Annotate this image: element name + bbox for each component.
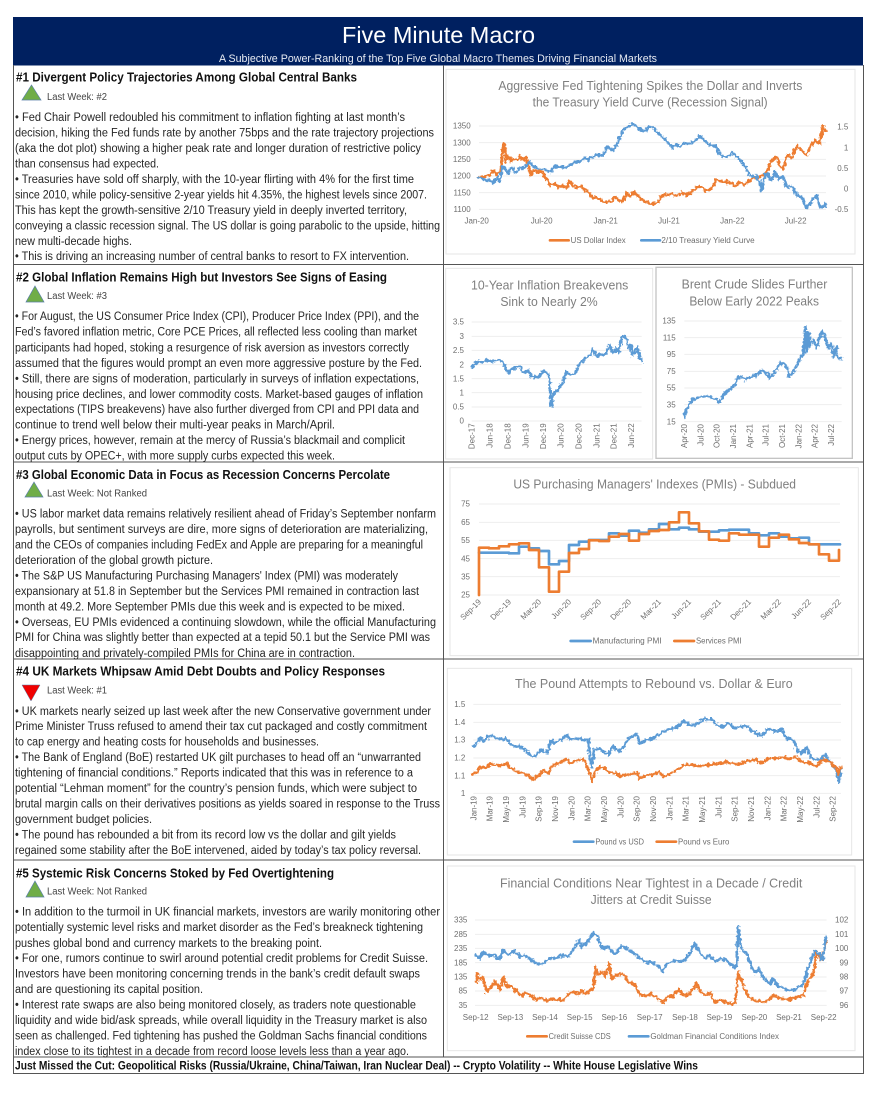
heading 2: #2 Global Inflation Remains High but Investors See Signs of Easing (16, 270, 387, 284)
icon: green up triangle (26, 881, 44, 897)
y axis labels: 0.5 (453, 403, 465, 412)
y axis labels: 2.5 (453, 346, 465, 355)
x axis labels: Sep-20 (579, 597, 603, 622)
legend: Credit Suisse CDS (549, 1032, 611, 1041)
right axis labels: 98 (839, 973, 849, 982)
body text: Investors have been monitoring concerning trends in the bank’s credit default swaps (15, 968, 420, 980)
x axis labels: Jun-20 (549, 597, 573, 621)
chart title: Sink to Nearly 2% (500, 294, 598, 309)
x axis labels: Jul-22 (785, 216, 807, 225)
y axis labels: 1.5 (453, 374, 465, 383)
x axis labels: Sep-20 (633, 795, 642, 822)
x axis labels: Dec-19 (489, 597, 513, 622)
x axis labels: Sep-12 (463, 1013, 489, 1022)
icon: green up triangle (22, 85, 41, 100)
left axis labels: 85 (458, 987, 468, 996)
body text: • Still, there are signs of moderation, particularly in surveys of inflation expectations, (15, 374, 419, 386)
body text: assumed that the figures would prompt an even more aggressive posture by the Fed. (15, 358, 422, 370)
x axis labels: Sep-16 (601, 1013, 628, 1022)
x axis labels: Jul-20 (696, 423, 705, 446)
legend: Goldman Financial Conditions Index (650, 1032, 779, 1041)
x axis labels (464, 216, 807, 225)
x axis labels: Jul-22 (812, 795, 821, 818)
x axis labels: Sep-22 (811, 1013, 837, 1022)
right axis labels: -0.5 (835, 205, 849, 214)
x axis labels (467, 423, 636, 449)
left axis labels: 1200 (453, 172, 471, 181)
body text: conveying a classic recession signal. The US dollar is going parabolic to the upside, hitting (15, 220, 440, 232)
chart: pound vs dollar and euro (447, 668, 852, 855)
body text: brutal margin calls on their derivatives positions as yields soared in response to the Truss (15, 798, 440, 810)
x axis labels: Jul-21 (762, 423, 771, 446)
line: 2/10 treasury yield curve (479, 124, 826, 208)
body text: • The pound has rebounded a bit from its record low vs the dollar and gilt yields (15, 830, 396, 842)
x axis labels: May-20 (600, 795, 609, 823)
left axis labels: 335 (454, 916, 468, 925)
left axis labels: 35 (458, 1001, 468, 1010)
body text (15, 706, 440, 857)
x axis labels: Jun-21 (592, 423, 601, 448)
x axis labels: Sep-18 (672, 1013, 698, 1022)
line: manufacturing PMI (479, 524, 840, 564)
last week rank: Last Week: Not Ranked (47, 488, 147, 500)
x axis labels: Jun-22 (627, 423, 636, 448)
chart title: Aggressive Fed Tightening Spikes the Dollar and Inverts (498, 78, 803, 93)
y axis labels: 45 (461, 554, 471, 563)
chart title: Brent Crude Slides Further (682, 277, 828, 292)
body text (15, 112, 440, 263)
body text: and are questioning its capital position. (15, 984, 203, 996)
y axis labels (461, 500, 471, 600)
x axis labels: Sep-14 (532, 1013, 558, 1022)
body text: regained some stability after the BoE intervened, aided by today’s tax policy reversal. (15, 845, 421, 857)
y axis labels: 15 (667, 417, 676, 426)
x axis labels: Sep-19 (535, 795, 544, 822)
x axis labels: Mar-21 (682, 795, 691, 821)
left axis labels: 1300 (453, 138, 471, 147)
body text: since 2010, while policy-sensitive 2-year yields hit 4.35%, the highest levels since 2007. (15, 190, 427, 202)
legend: Pound vs Euro (678, 837, 730, 846)
body text: • Fed Chair Powell redoubled his commitment to inflation fighting at last month’s (15, 112, 405, 124)
body text: continue to trend well below their multi-year peaks in March/April. (15, 420, 335, 432)
body text: new multi-decade highs. (15, 236, 132, 248)
panel: theme 2 text (15, 270, 423, 462)
chart title: Jitters at Credit Suisse (591, 892, 712, 907)
x axis labels: Mar-21 (639, 597, 663, 622)
left axis labels (454, 916, 468, 1010)
right axis labels: 97 (839, 987, 849, 996)
x axis labels: Jul-22 (827, 423, 836, 446)
line: pound vs euro (474, 757, 841, 782)
x axis labels (459, 597, 843, 622)
body text: This has kept the growth-sensitive 2/10 Treasury yield in deeply inverted territory, (15, 205, 407, 217)
y axis labels: 1.4 (454, 718, 466, 727)
chart title: US Purchasing Managers' Indexes (PMIs) - Subdued (513, 476, 796, 491)
x axis labels: Sep-21 (776, 1013, 802, 1022)
y axis labels: 1.1 (454, 771, 466, 780)
left axis labels: 1150 (453, 188, 471, 197)
y axis labels: 75 (461, 500, 471, 509)
x axis labels: Sep-21 (731, 795, 740, 822)
chart title: Below Early 2022 Peaks (689, 293, 819, 308)
x axis labels: Dec-20 (609, 597, 633, 622)
body text: • Energy prices, however, remain at the mercy of Russia’s blackmail and complicit (15, 435, 406, 447)
body text: (aka the dot plot) showing a higher peak rate and longer duration of restrictive policy (15, 143, 421, 155)
x axis labels: Sep-22 (819, 597, 843, 622)
x axis labels: Jan-22 (763, 795, 772, 820)
legend: US Dollar Index (571, 236, 626, 245)
chart: 10-year inflation breakevens (446, 268, 653, 459)
y axis labels: 3 (460, 332, 465, 341)
legend: Services PMI (696, 637, 742, 646)
body text: to cap energy and heating costs for households and businesses. (15, 736, 319, 748)
x axis labels (680, 423, 836, 448)
right axis labels: 99 (839, 958, 849, 967)
right axis labels: 1.5 (837, 123, 849, 132)
body text: Fed’s favored inflation metric, Core PCE Prices, all reflected less cooling than market (15, 326, 418, 338)
heading 1: #1 Divergent Policy Trajectories Among Global Central Banks (16, 70, 357, 84)
chart: financial conditions and Credit Suisse CDS (447, 866, 855, 1051)
x axis labels: Apr-21 (745, 423, 754, 448)
x axis labels: Mar-20 (519, 597, 543, 622)
y axis labels: 55 (461, 536, 471, 545)
body text: potentially systemic level risks and market disorder as the Fed’s breakneck tightening (15, 922, 423, 934)
subtitle: A Subjective Power-Ranking of the Top Five Global Macro Themes Driving Financial Markets (219, 53, 657, 65)
x axis labels: Dec-19 (539, 423, 548, 449)
panel: theme 4 text (15, 664, 440, 857)
body text (15, 508, 436, 660)
x axis labels: Jun-20 (557, 423, 566, 448)
body text: expectations (TIPS breakevens) have also further diverged from CPI and PPI data and (15, 404, 419, 416)
title: Five Minute Macro (342, 22, 535, 48)
right axis labels: 102 (835, 916, 849, 925)
x axis labels: Oct-21 (778, 423, 787, 448)
last week rank: Last Week: #1 (47, 686, 107, 696)
last week rank: Last Week: Not Ranked (47, 886, 147, 898)
right axis labels: 96 (839, 1001, 849, 1010)
panel: theme 1 text (15, 70, 440, 263)
body text: than consensus had expected. (15, 158, 159, 170)
right axis labels (835, 123, 849, 214)
left axis labels: 1350 (453, 122, 471, 131)
legend (574, 837, 730, 846)
icon: green up triangle (25, 482, 43, 497)
y axis labels: 1.5 (454, 700, 466, 709)
body text: participants had hoped, stoking a resurgence of risk aversion as investors correctly (15, 342, 409, 354)
x axis labels: Mar-22 (780, 795, 789, 821)
x axis labels: Jan-20 (464, 216, 489, 225)
x axis labels: May-22 (796, 795, 805, 823)
x axis labels: Oct-20 (713, 423, 722, 448)
x axis labels: Jan-21 (665, 795, 674, 820)
legend (571, 637, 742, 646)
legend (527, 1032, 779, 1041)
y axis labels: 35 (461, 572, 471, 581)
right axis labels: 0.5 (837, 164, 849, 173)
last week rank: Last Week: #2 (47, 92, 107, 103)
x axis labels: Dec-21 (729, 597, 753, 622)
body text: and the CEOs of companies including FedEx and Apple are preparing for a meaningful (15, 540, 423, 552)
body text: government budget policies. (15, 814, 152, 826)
x axis labels: Mar-20 (584, 795, 593, 821)
left axis labels: 1250 (453, 155, 471, 164)
heading 5: #5 Systemic Risk Concerns Stoked by Fed Overtightening (16, 866, 334, 880)
body text: • This is driving an increasing number of central banks to resort to FX intervention. (15, 251, 409, 263)
x axis labels: May-21 (698, 795, 707, 823)
x axis labels: Jan-22 (720, 216, 745, 225)
x axis labels: Jan-21 (729, 423, 738, 448)
legend: 2/10 Treasury Yield Curve (661, 236, 755, 245)
x axis labels: Jun-21 (669, 597, 693, 621)
left axis labels: 185 (454, 958, 468, 967)
y axis labels: 0 (460, 417, 465, 426)
line: brent crude price (684, 327, 842, 417)
line: US dollar index (479, 125, 826, 204)
body text: payrolls, but sentiment surveys are dire, more signs of deterioration are materializing, (15, 524, 428, 536)
x axis labels: Dec-21 (610, 423, 619, 449)
x axis labels: Jun-22 (789, 597, 813, 621)
body text: output cuts by OPEC+, with more supply curbs expected this week. (15, 450, 335, 462)
body text: • US labor market data remains relatively resilient ahead of Friday’s September nonfarm (15, 508, 436, 520)
chart title: the Treasury Yield Curve (Recession Signal) (533, 95, 768, 110)
left axis labels (453, 122, 471, 214)
y axis labels (453, 318, 465, 426)
x axis labels: Sep-13 (497, 1013, 524, 1022)
panel: theme 3 text (15, 467, 436, 660)
left axis labels: 1100 (453, 205, 471, 214)
body text (15, 906, 440, 1058)
x axis labels: Jan-21 (593, 216, 618, 225)
right axis labels: 100 (835, 944, 849, 953)
body text: • Interest rate swaps are also being monitored closely, as traders note questionable (15, 1000, 416, 1012)
body text: pushes global bond and currency markets to the breaking point. (15, 938, 322, 950)
left axis labels: 135 (454, 973, 468, 982)
x axis labels: Sep-22 (829, 795, 838, 822)
y axis labels (454, 700, 466, 798)
x axis labels: Jan-22 (794, 423, 803, 448)
right axis labels (835, 916, 849, 1010)
x axis labels (463, 1013, 837, 1022)
last week rank: Last Week: #3 (47, 291, 107, 302)
x axis labels: Apr-22 (811, 423, 820, 448)
left axis labels: 235 (454, 944, 468, 953)
body text (15, 311, 423, 462)
icon: green up triangle (26, 286, 44, 302)
body text: potential “Lehman moment” for the country’s pension funds, which were subject to (15, 783, 417, 795)
x axis labels: Sep-20 (741, 1013, 768, 1022)
line: services PMI (479, 512, 839, 595)
body text: seen as challenged. Fed tightening has pushed the Goldman Sachs financial conditions (15, 1030, 427, 1042)
y axis labels: 2 (460, 360, 465, 369)
y axis labels: 1 (461, 789, 466, 798)
x axis labels: Jun-19 (521, 423, 530, 448)
panel: theme 5 text (15, 866, 440, 1058)
chart title: The Pound Attempts to Rebound vs. Dollar & Euro (515, 676, 793, 691)
body text: index close to its tightest in a decade from record loose levels less than a year ago. (15, 1046, 409, 1058)
y axis labels: 95 (667, 350, 676, 359)
y axis labels (662, 317, 676, 426)
body text: • UK markets nearly seized up last week after the new Conservative government under (15, 706, 431, 718)
header banner (13, 17, 863, 66)
heading 3: #3 Global Economic Data in Focus as Recession Concerns Percolate (16, 467, 390, 482)
x axis labels: Sep-19 (459, 597, 483, 622)
y axis labels: 135 (662, 317, 676, 326)
body text: expansionary at 51.8 in September but the Services PMI remained in contraction last (15, 586, 420, 598)
y axis labels: 25 (461, 591, 471, 600)
x axis labels: Jul-20 (616, 795, 625, 818)
body text: • The Bank of England (BoE) restarted UK gilt purchases to head off an “unwarranted (15, 752, 421, 764)
x axis labels: Nov-19 (551, 795, 560, 822)
right axis labels: 0 (844, 184, 849, 193)
body text: • For one, rumors continue to swirl around potential credit problems for Credit Suisse. (15, 953, 428, 965)
body text: Prime Minister Truss refused to amend their tax cut packaged and costly commitment (15, 721, 428, 733)
x axis labels: Jul-20 (531, 216, 553, 225)
body text: housing price declines, and lower commodity costs. Market-based gauges of inflation (15, 389, 423, 401)
y axis labels: 35 (667, 400, 676, 409)
chart title (500, 875, 803, 907)
legend (550, 236, 755, 245)
x axis labels: Nov-20 (649, 795, 658, 822)
body text: month at 49.2. More September PMIs due this week and is expected to be mixed. (15, 602, 405, 614)
x axis labels: Jul-21 (658, 216, 680, 225)
x axis labels: Jul-21 (714, 795, 723, 818)
x axis labels: Sep-15 (567, 1013, 593, 1022)
chart title: Financial Conditions Near Tightest in a Decade / Credit (500, 875, 803, 890)
x axis labels: Jan-19 (469, 795, 478, 820)
y axis labels: 3.5 (453, 318, 465, 327)
x axis labels: Jul-19 (518, 795, 527, 818)
x axis labels: Mar-19 (486, 795, 495, 821)
line: pound vs USD (474, 719, 841, 782)
y axis labels: 55 (667, 384, 676, 393)
x axis labels: Jan-20 (567, 795, 576, 820)
legend: Manufacturing PMI (593, 637, 662, 646)
right axis labels: 101 (835, 930, 849, 939)
x axis labels: Nov-21 (747, 795, 756, 822)
body text: • Overseas, EU PMIs evidenced a continuing slowdown, while the official Manufacturing (15, 617, 436, 629)
body text: • In addition to the turmoil in UK financial markets, investors are warily monitoring other (15, 906, 440, 918)
x axis labels: Dec-17 (467, 423, 476, 449)
y axis labels: 65 (461, 518, 471, 527)
x axis labels: Jun-18 (485, 423, 494, 448)
line: breakevens (472, 336, 642, 407)
icon: red down triangle (22, 685, 40, 701)
heading 4: #4 UK Markets Whipsaw Amid Debt Doubts and Policy Responses (16, 664, 385, 678)
body text: • For August, the US Consumer Price Index (CPI), Producer Price Index (PPI), and the (15, 311, 419, 323)
y axis labels: 1.3 (454, 736, 466, 745)
x axis labels: Dec-18 (503, 423, 512, 449)
y axis labels: 1.2 (454, 754, 466, 763)
x axis labels: Mar-22 (759, 597, 783, 622)
right axis labels: 1 (844, 143, 849, 152)
chart title (471, 277, 629, 309)
left axis labels: 285 (454, 930, 468, 939)
y axis labels: 1 (460, 388, 465, 397)
x axis labels: Dec-20 (574, 423, 583, 449)
body text: PMI for China was slightly better than expected at a tepid 50.1 but the Service PMI was (15, 632, 430, 644)
chart: Brent crude (656, 267, 852, 458)
chart: Fed tightening, dollar and yield curve (446, 69, 855, 254)
body text: liquidity and wide bid/ask spreads, while overall liquidity in the Treasury market is also (15, 1015, 427, 1027)
body text: tightening of financial conditions.” Reports indicated that this was in reference to a (15, 768, 414, 780)
line: Credit Suisse CDS (476, 942, 826, 1003)
x axis labels (469, 795, 838, 823)
x axis labels: Sep-19 (706, 1013, 733, 1022)
chart: US PMIs (450, 468, 858, 656)
x axis labels: Sep-21 (699, 597, 723, 622)
x axis labels: May-19 (502, 795, 511, 823)
chart title: 10-Year Inflation Breakevens (471, 277, 629, 292)
body text: decision, hiking the Fed funds rate by another 75bps and the rate trajectory projections (15, 128, 434, 140)
y axis labels: 75 (667, 367, 676, 376)
x axis labels: Sep-17 (637, 1013, 663, 1022)
y axis labels: 115 (663, 333, 676, 342)
footer: just missed the cut: Just Missed the Cut: Geopolitical Risks (Russia/Ukraine, China/Taiwan, Iran Nuclear Deal) -- Crypto Volatility -- White House Legislative Wins (15, 1060, 698, 1072)
chart title (682, 277, 828, 308)
body text: deterioration of the global growth picture. (15, 555, 213, 567)
chart title (498, 78, 803, 110)
line: Goldman financial conditions index (476, 925, 826, 991)
body text: disappointing and privately-compiled PMIs for China are in contraction. (15, 648, 355, 660)
legend: Pound vs USD (595, 837, 644, 846)
body text: • Treasuries have sold off sharply, with the 10-year flirting with 4% for the first time (15, 174, 414, 186)
x axis labels: Apr-20 (680, 423, 689, 448)
body text: • The S&P US Manufacturing Purchasing Managers' Index (PMI) was moderately (15, 570, 398, 582)
